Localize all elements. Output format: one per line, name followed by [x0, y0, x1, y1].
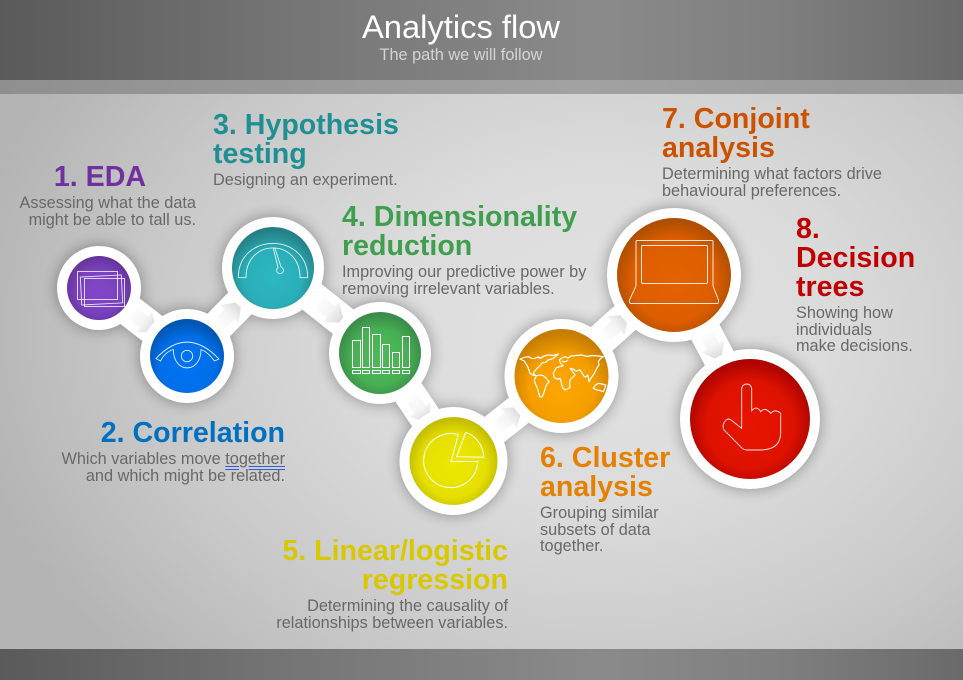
step 6: cluster text [540, 442, 670, 555]
heading: 1. EDA [54, 161, 146, 193]
description: behavioural preferences. [662, 182, 841, 200]
description: Determining the causality of [307, 597, 508, 615]
subtitle: The path we will follow [380, 46, 542, 64]
heading [282, 535, 508, 596]
connector 4 to 5 [384, 367, 456, 452]
connector 7 to 8 [680, 304, 746, 389]
heading: analysis [662, 132, 775, 164]
node 7: conjoint laptop icon [607, 208, 741, 342]
heading: analysis [540, 471, 653, 503]
connector shadows [56, 207, 821, 516]
description: Determining what factors drive [662, 165, 882, 183]
heading: trees [796, 271, 864, 303]
node 6: cluster world map icon [504, 319, 618, 433]
description [342, 263, 586, 298]
description [61, 450, 285, 484]
description: Improving our predictive power by [342, 263, 586, 281]
connector 3 to 4 [290, 275, 372, 349]
connector 5 to 6 [468, 381, 550, 455]
step 8: decision trees text [796, 213, 915, 355]
step 2: correlation text [61, 417, 285, 484]
heading: regression [362, 564, 508, 596]
heading: 3. Hypothesis [213, 109, 399, 141]
description [276, 597, 508, 632]
heading: testing [213, 138, 307, 170]
heading [342, 201, 577, 262]
description: individuals [796, 320, 872, 338]
footer bar [0, 649, 963, 680]
heading [662, 103, 810, 164]
description: make decisions. [796, 337, 913, 355]
step 3: hypothesis text [213, 109, 399, 189]
description [796, 304, 913, 355]
heading: 7. Conjoint [662, 103, 810, 135]
description: might be able to tall us. [29, 210, 196, 228]
step 5: regression text [276, 535, 508, 632]
heading [796, 213, 915, 303]
heading: 5. Linear/logistic [282, 535, 508, 567]
description [540, 504, 659, 555]
description: together. [540, 537, 603, 555]
step 1: EDA text [20, 161, 196, 228]
header lower band [0, 80, 963, 94]
node 5: regression pie icon [400, 407, 508, 515]
heading: 4. Dimensionality [342, 201, 577, 233]
description: Which variables move together [61, 450, 285, 468]
heading: 8. [796, 213, 820, 245]
node 3: hypothesis gauge icon [222, 217, 324, 319]
heading: 2. Correlation [101, 417, 285, 449]
description: Assessing what the data [20, 194, 196, 212]
description: and which might be related. [86, 466, 285, 484]
description: Grouping similar [540, 504, 659, 522]
step 7: conjoint text [662, 103, 882, 200]
connector 2 to 3 [190, 274, 269, 354]
step 4: dimensionality text [342, 201, 586, 298]
description: removing irrelevant variables. [342, 280, 555, 298]
description: relationships between variables. [276, 614, 508, 632]
node 8: decision hand icon [680, 349, 820, 489]
description [20, 194, 196, 228]
connector 1 to 2 [103, 285, 185, 359]
title: Analytics flow [362, 8, 560, 45]
description: Showing how [796, 304, 893, 322]
node 2: correlation eye icon [140, 309, 234, 403]
description: Designing an experiment. [213, 171, 398, 189]
description: subsets of data [540, 520, 650, 538]
node 1: EDA icon [57, 246, 141, 330]
heading: 6. Cluster [540, 442, 670, 474]
heading: Decision [796, 242, 915, 274]
node 4: dimensionality bars icon [329, 302, 431, 404]
heading [213, 109, 399, 170]
description [662, 165, 882, 200]
header bar [0, 0, 963, 80]
connector 6 to 7 [576, 287, 656, 365]
title block [362, 8, 560, 64]
heading: reduction [342, 230, 472, 262]
heading [540, 442, 670, 503]
